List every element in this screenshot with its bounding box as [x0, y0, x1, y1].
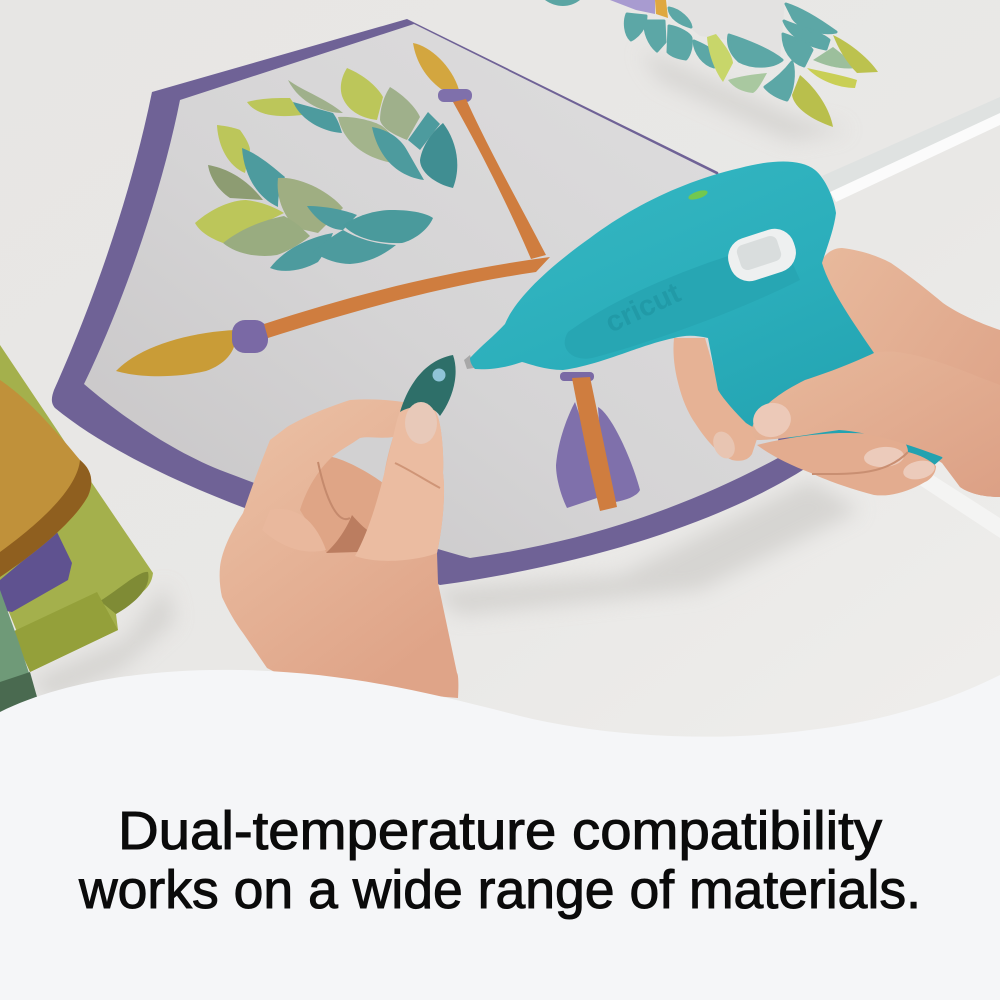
shadows on the work surface	[30, 50, 860, 700]
gun logo text: cricut	[600, 277, 686, 339]
caption heading: Dual-temperature compatibility	[118, 801, 882, 861]
felt arrow: purple fletching	[556, 372, 640, 511]
glue stick, rear	[822, 97, 1000, 202]
hand, right, middle and ring fingers	[757, 433, 937, 495]
felt arrow: upper right with orange shaft	[413, 43, 546, 259]
glue gun body	[464, 162, 946, 467]
caption heading	[78, 801, 921, 920]
felt shield: grey panel	[84, 24, 780, 558]
gun trigger window	[723, 224, 801, 286]
photo background: work surface	[0, 0, 1000, 760]
felt leaf with glue dot	[400, 355, 456, 416]
felt shield: purple border	[52, 19, 806, 585]
felt leaves: lower cluster	[195, 125, 433, 271]
thumbnail on left hand	[405, 402, 437, 444]
felt leaves: upper cluster	[247, 68, 457, 188]
felt arrow: lower left with orange shaft	[116, 257, 550, 376]
felt wreath, top right	[545, 0, 878, 127]
wave panel	[0, 670, 1000, 1000]
gun status light	[687, 188, 709, 202]
caption heading: works on a wide range of materials.	[78, 860, 921, 920]
hand, right, back of hand behind gun	[820, 248, 1000, 497]
folded felt stack, left	[0, 345, 153, 713]
hand, left, holding felt leaf	[220, 399, 458, 698]
glue stick, front cable	[915, 470, 1000, 538]
hand, right, index finger on trigger	[673, 338, 760, 462]
hand, right, thumb over grip	[749, 351, 1000, 497]
